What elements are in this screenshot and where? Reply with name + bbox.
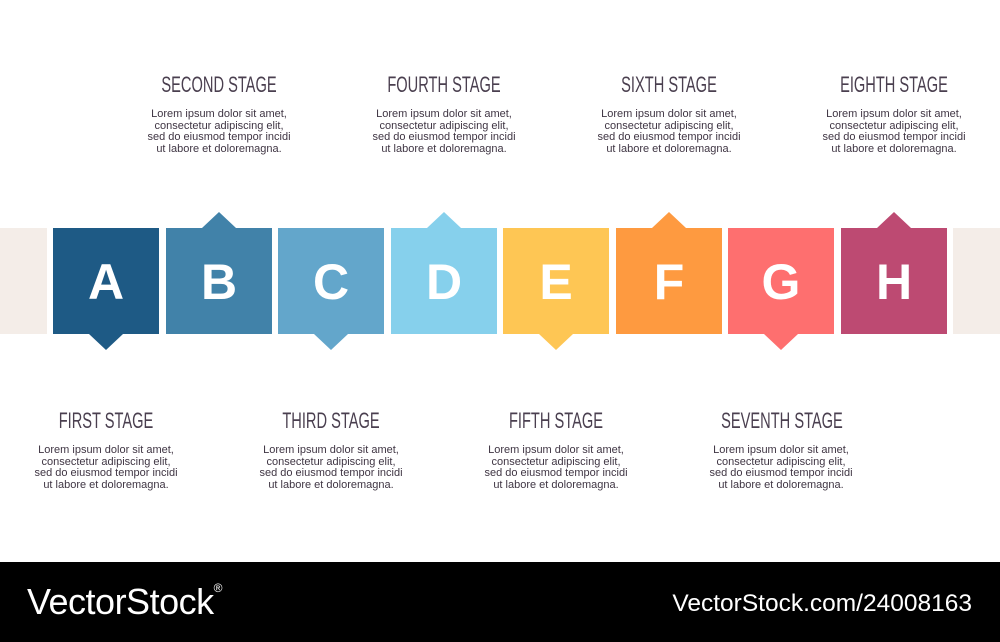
stage: fourth: Lorem ipsum dolor sit amet, bbox=[376, 108, 512, 120]
stage: sixth: SIXTH STAGE bbox=[621, 72, 717, 97]
stage: fifth bbox=[484, 408, 628, 491]
stage: fifth: sed do eiusmod tempor incidi bbox=[484, 467, 628, 479]
stage: third: THIRD STAGE bbox=[282, 408, 380, 433]
footer logo: VectorStock® bbox=[27, 581, 222, 622]
stage: fifth: Lorem ipsum dolor sit amet, bbox=[488, 444, 624, 456]
stage: eighth: ut labore et doloremagna. bbox=[831, 143, 957, 155]
stage: seventh bbox=[709, 408, 853, 491]
stage: first bbox=[34, 408, 178, 491]
stage: fifth: ut labore et doloremagna. bbox=[493, 479, 619, 491]
square C: C bbox=[313, 254, 349, 310]
stage: fourth: ut labore et doloremagna. bbox=[381, 143, 507, 155]
stage: sixth: ut labore et doloremagna. bbox=[606, 143, 732, 155]
stage: seventh: SEVENTH STAGE bbox=[721, 408, 843, 433]
square D: D bbox=[426, 254, 462, 310]
stage: eighth: EIGHTH STAGE bbox=[840, 72, 948, 97]
stage: seventh: consectetur adipiscing elit, bbox=[716, 456, 846, 468]
stage: eighth: sed do eiusmod tempor incidi bbox=[822, 131, 966, 143]
square E: E bbox=[539, 254, 573, 310]
stage: fourth: sed do eiusmod tempor incidi bbox=[372, 131, 516, 143]
stage: third: ut labore et doloremagna. bbox=[268, 479, 394, 491]
stage: seventh: ut labore et doloremagna. bbox=[718, 479, 844, 491]
stage: seventh: Lorem ipsum dolor sit amet, bbox=[713, 444, 849, 456]
stage: second: consectetur adipiscing elit, bbox=[154, 120, 284, 132]
stage: fifth: FIFTH STAGE bbox=[509, 408, 603, 433]
square C bbox=[278, 228, 384, 350]
stage: first: consectetur adipiscing elit, bbox=[41, 456, 170, 468]
stage: first: ut labore et doloremagna. bbox=[43, 479, 169, 491]
stage: second: SECOND STAGE bbox=[161, 72, 277, 97]
square B bbox=[166, 212, 272, 334]
footer url: VectorStock.com/24008163 bbox=[672, 590, 972, 617]
square G: G bbox=[762, 254, 800, 310]
square H: H bbox=[876, 254, 912, 310]
stage: eighth: consectetur adipiscing elit, bbox=[829, 120, 958, 132]
stage: third bbox=[259, 408, 403, 491]
stage: eighth bbox=[822, 72, 966, 155]
square B: B bbox=[201, 254, 237, 310]
square H bbox=[841, 212, 947, 334]
stage: fourth: FOURTH STAGE bbox=[387, 72, 501, 97]
stage: fifth: consectetur adipiscing elit, bbox=[491, 456, 620, 468]
square D bbox=[391, 212, 497, 334]
square F: F bbox=[654, 254, 684, 310]
stage: first: sed do eiusmod tempor incidi bbox=[34, 467, 178, 479]
square G bbox=[728, 228, 834, 350]
stage: sixth bbox=[597, 72, 741, 155]
stage: third: sed do eiusmod tempor incidi bbox=[259, 467, 403, 479]
footer bbox=[0, 562, 1000, 642]
stage: fourth bbox=[372, 72, 516, 155]
stage: third: Lorem ipsum dolor sit amet, bbox=[263, 444, 399, 456]
stage: third: consectetur adipiscing elit, bbox=[266, 456, 396, 468]
stage: second: sed do eiusmod tempor incidi bbox=[147, 131, 291, 143]
stage: sixth: consectetur adipiscing elit, bbox=[604, 120, 734, 132]
stage: second: Lorem ipsum dolor sit amet, bbox=[151, 108, 287, 120]
stage: first: Lorem ipsum dolor sit amet, bbox=[38, 444, 174, 456]
stage: eighth: Lorem ipsum dolor sit amet, bbox=[826, 108, 962, 120]
square E bbox=[503, 228, 609, 350]
stage: seventh: sed do eiusmod tempor incidi bbox=[709, 467, 853, 479]
square A: A bbox=[88, 254, 124, 310]
stage: first: FIRST STAGE bbox=[59, 408, 153, 433]
stage: second bbox=[147, 72, 291, 155]
stage: fourth: consectetur adipiscing elit, bbox=[379, 120, 508, 132]
square A bbox=[53, 228, 159, 350]
stage: sixth: Lorem ipsum dolor sit amet, bbox=[601, 108, 737, 120]
square F bbox=[616, 212, 722, 334]
stage: second: ut labore et doloremagna. bbox=[156, 143, 282, 155]
stage: sixth: sed do eiusmod tempor incidi bbox=[597, 131, 741, 143]
